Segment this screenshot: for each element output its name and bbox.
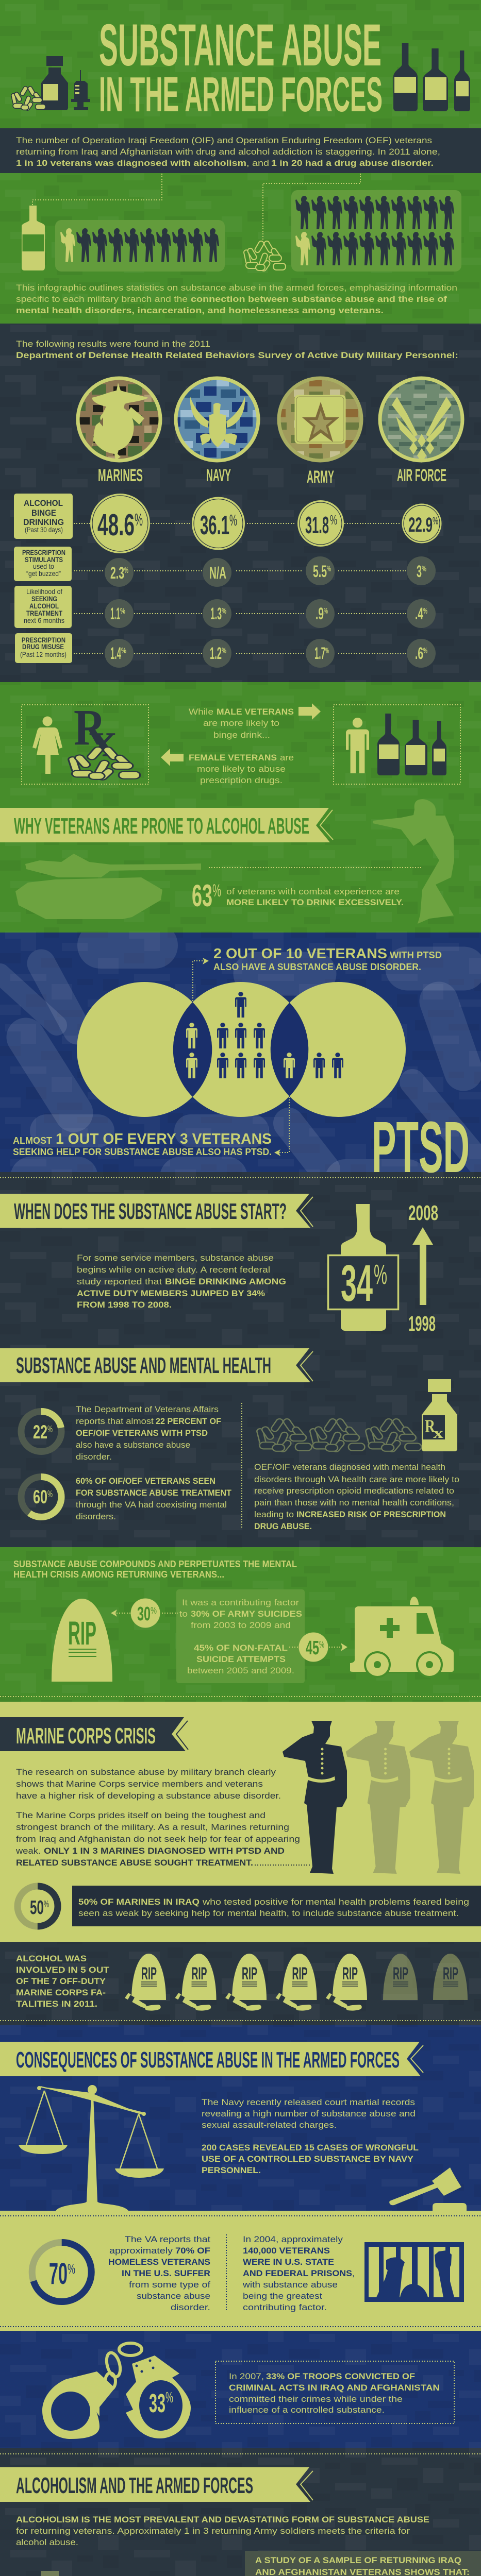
text: marine corps research: ONLY 1 IN 3 MARINES DIAGNOSED WITH PTSD AND xyxy=(44,1846,285,1856)
intro text band xyxy=(0,128,481,173)
text: veterans in prison: with substance abuse xyxy=(242,2280,338,2290)
text: veterans in prison: 140,000 VETERANS xyxy=(243,2246,330,2256)
intro text band: 1 in 10 veterans was diagnosed with alcoholism xyxy=(16,158,246,168)
text: marine corps research: shows that Marine Corps service members and veterans xyxy=(16,1779,263,1789)
donut chart: 60 percent: 60 xyxy=(33,1486,47,1507)
donut chart: 60 percent: % xyxy=(47,1489,53,1499)
venn diagram xyxy=(77,982,406,1117)
branch labels: NAVY xyxy=(206,466,231,485)
text: almost 1 out of every 3 veterans: ALMOST xyxy=(13,1136,52,1146)
text: opioid risk: pain than those with no mental health conditions, xyxy=(254,1498,454,1507)
stat circles: drug misuse: % xyxy=(121,647,126,655)
PTSD ghost pill background xyxy=(0,945,481,1180)
text: 2 out of 10 veterans: WITH PTSD xyxy=(390,950,442,960)
callout: male veterans binge drink: MALE VETERANS xyxy=(217,707,294,717)
row label: alcohol binge drinking: (Past 30 days) xyxy=(25,526,63,534)
panel: male veterans icons xyxy=(334,705,460,784)
section background: suicide green xyxy=(0,1547,481,1702)
stat circles: binge drinking: 36.1 xyxy=(200,511,229,540)
icon: Rx bottle: R xyxy=(425,1416,436,1436)
intro text band: , and xyxy=(246,158,269,168)
text: alcohol and fatalities: TALITIES IN 2011. xyxy=(16,1999,97,2009)
text: binge drinking jump: For some service members, substance abuse xyxy=(77,1253,274,1263)
text: survey intro: Department of Defense Health Related Behaviors Survey of Active Duty Military Personnel: xyxy=(16,350,458,360)
icon: Rx bottle: x xyxy=(433,1425,443,1442)
callout: female veterans prescription abuse xyxy=(189,753,294,785)
stat circles: drug misuse: % xyxy=(325,647,329,655)
stat circles: seeking treatment: .9 xyxy=(316,604,324,623)
stat circles: stimulants: % xyxy=(124,566,128,575)
text: homeless veterans xyxy=(108,2234,210,2312)
donut chart: 70 percent: % xyxy=(68,2261,75,2277)
stat circles: stimulants: 2.3 xyxy=(110,564,124,582)
donut chart: 50 percent: % xyxy=(44,1899,49,1909)
text: survey intro xyxy=(16,339,458,360)
heading: compounds mental health crisis: HEALTH CRISIS AMONG RETURNING VETERANS... xyxy=(13,1569,224,1580)
stat circles: binge drinking: 48.6 xyxy=(97,508,135,542)
text: veterans in prison: WERE IN U.S. STATE xyxy=(243,2257,334,2267)
text: binge drinking jump: begins while on active duty. A recent federal xyxy=(77,1265,270,1275)
callout: male veterans binge drink: While xyxy=(189,707,213,717)
section background: header green xyxy=(0,0,481,324)
text: VA 22 percent xyxy=(76,1404,221,1462)
callout: criminal acts: In 2007, xyxy=(229,2371,264,2381)
arrow: 1998 to 2008 xyxy=(408,1201,438,1335)
callout: criminal acts: influence of a controlled substance. xyxy=(229,2405,385,2415)
dotted connectors from intro xyxy=(32,174,360,241)
donut chart: 50 percent xyxy=(18,1886,58,1926)
row label: prescription drug misuse: (Past 12 months) xyxy=(20,650,67,658)
text: opioid risk: DRUG ABUSE. xyxy=(254,1521,312,1531)
text: homeless veterans: from some type of xyxy=(129,2280,210,2290)
heading: compounds mental health crisis: SUBSTANCE ABUSE COMPOUNDS AND PERPETUATES THE MENTAL xyxy=(13,1559,297,1569)
branch labels xyxy=(98,466,446,487)
icon: Rx bottle xyxy=(422,1379,457,1451)
callout: criminal acts: 33% OF TROOPS CONVICTED OF xyxy=(266,2371,415,2381)
row label: prescription stimulants: “get buzzed” xyxy=(26,569,61,578)
text: veterans in prison: being the greatest xyxy=(243,2291,322,2301)
row label: prescription drug misuse: PRESCRIPTION xyxy=(22,636,65,644)
text: VA 60 percent: 60% OF OIF/OEF VETERANS SEEN xyxy=(76,1476,215,1486)
icon row: seven gravestones xyxy=(125,1954,468,2011)
text: navy court martial xyxy=(202,2097,419,2175)
panel: 50 percent of marines xyxy=(72,1886,481,1926)
arrow: dotted top pointer xyxy=(193,958,209,1001)
arrow: dotted bottom pointer xyxy=(274,1097,289,1156)
row label: seeking alcohol treatment: SEEKING xyxy=(31,595,57,603)
stat circles: stimulants: % xyxy=(327,565,331,573)
row label: seeking alcohol treatment: TREATMENT xyxy=(26,609,62,617)
intro text band: returning from Iraq and Afghanistan with drug and alcohol addiction is staggering. In 2011 alone, xyxy=(16,147,440,157)
icon: scales of justice xyxy=(19,2085,164,2211)
icon: saluting marines xyxy=(283,1721,474,1874)
icon: bottle with 34 percent xyxy=(328,1204,398,1331)
text: opioid risk: leading to xyxy=(254,1510,294,1519)
donut chart: 50 percent: 50 xyxy=(30,1897,44,1919)
banner: consequences xyxy=(0,2042,423,2076)
icon: handcuffs with 33 percent: % xyxy=(165,2389,173,2406)
callout: criminal acts xyxy=(215,2361,454,2424)
text: navy court martial: The Navy recently released court martial records xyxy=(202,2097,415,2107)
panel: suicide statistics xyxy=(176,1589,305,1683)
text: infographic outline: specific to each military branch and the xyxy=(16,294,188,304)
row label: prescription stimulants xyxy=(14,547,72,581)
text: survey intro: The following results were found in the 2011 xyxy=(16,339,210,349)
stat: 30 percent: 30 xyxy=(137,1603,151,1625)
row label: seeking alcohol treatment: Likelihood of xyxy=(26,587,62,596)
branch labels: MARINES xyxy=(98,466,143,485)
icon: gravestone RIP: RIP xyxy=(68,1615,96,1652)
text: veterans in prison: , xyxy=(352,2268,355,2278)
donut chart: 70 percent: 70 xyxy=(49,2257,68,2291)
icon: bottle with 34 percent: % xyxy=(374,1259,387,1290)
stat circles: drug misuse: 1.7 xyxy=(314,644,325,663)
stat: 63 percent combat experience: % xyxy=(212,881,221,901)
row label: seeking alcohol treatment: ALCOHOL xyxy=(29,602,59,610)
stat: 45 percent: % xyxy=(319,1639,324,1650)
banner: substance abuse and mental health: SUBSTANCE ABUSE AND MENTAL HEALTH xyxy=(16,1353,271,1378)
text: opioid risk: disorders through VA health care are more likely to xyxy=(254,1475,459,1484)
row label: alcohol binge drinking: DRINKING xyxy=(23,517,64,527)
banner: alcoholism and the armed forces xyxy=(0,2467,313,2502)
text: alcohol and fatalities: ALCOHOL WAS xyxy=(16,1954,87,1963)
icon: bottle with 34 percent: 34 xyxy=(341,1255,373,1312)
text: almost 1 out of every 3 veterans xyxy=(13,1131,272,1157)
panel: female veterans icons: x xyxy=(89,712,117,768)
stat circles: stimulants: 3 xyxy=(417,562,422,581)
text: almost 1 out of every 3 veterans: SEEKING HELP FOR SUBSTANCE ABUSE ALSO HAS PTSD. xyxy=(13,1147,272,1157)
text: marine corps research: The research on substance abuse by military branch clearly xyxy=(16,1767,276,1777)
text: homeless veterans: HOMELESS VETERANS xyxy=(108,2257,210,2267)
text: alcohol and fatalities: OF THE 7 OFF-DUTY xyxy=(16,1976,106,1986)
text: infographic outline: connection between substance abuse and the rise of xyxy=(191,294,447,304)
row label: prescription drug misuse: DRUG MISUSE xyxy=(22,642,64,651)
row label: alcohol binge drinking: BINGE xyxy=(31,508,56,518)
text: VA 22 percent: reports that almost xyxy=(76,1416,154,1426)
stat: 63 percent combat experience: MORE LIKELY TO DRINK EXCESSIVELY. xyxy=(226,897,404,907)
intro text band: The number of Operation Iraqi Freedom (OIF) and Operation Enduring Freedom (OEF) veterans xyxy=(16,135,432,145)
callout: female veterans prescription abuse: prescription drugs. xyxy=(200,775,283,785)
stat circles: seeking treatment: % xyxy=(324,607,328,616)
callout: female veterans prescription abuse: are xyxy=(280,753,294,762)
text: homeless veterans: The VA reports that xyxy=(125,2234,210,2244)
text: veterans in prison: In 2004, approximately xyxy=(243,2234,343,2244)
text: navy court martial: sexual assault-related charges. xyxy=(202,2120,337,2130)
table dotted connectors xyxy=(74,523,407,653)
text: VA 60 percent xyxy=(76,1476,232,1521)
stat circles: binge drinking: % xyxy=(135,510,143,529)
text: alcohol and fatalities: MARINE CORPS FA- xyxy=(16,1988,106,1997)
text: alcohol and fatalities: INVOLVED IN 5 OUT xyxy=(16,1965,110,1975)
panel: study heading xyxy=(245,2551,481,2576)
icon: gravestone RIP xyxy=(52,1599,112,1682)
stat: 30 percent xyxy=(111,1598,178,1628)
stat circles: binge drinking: 22.9 xyxy=(408,514,433,536)
icon: handcuffs with 33 percent xyxy=(42,2343,191,2439)
stat circles: seeking treatment: 1.3 xyxy=(210,604,222,623)
panel: female veterans icons: R xyxy=(74,699,107,756)
stat: 45 percent: 45 xyxy=(306,1637,319,1659)
text: VA 60 percent: through the VA had coexisting mental xyxy=(76,1500,227,1510)
intro text band: 1 in 20 had a drug abuse disorder. xyxy=(271,158,434,168)
text: 2 out of 10 veterans xyxy=(213,945,442,972)
stat circles: drug misuse: 1.2 xyxy=(210,644,222,663)
stat: 45 percent xyxy=(289,1632,347,1662)
stat: 30 percent: % xyxy=(151,1605,157,1616)
stat: 63 percent combat experience xyxy=(192,878,404,913)
emblem: navy xyxy=(176,378,258,461)
icon: prison bars with hands xyxy=(364,2242,464,2302)
stat: 63 percent combat experience: of veterans with combat experience are xyxy=(226,887,400,896)
text: almost 1 out of every 3 veterans: 1 OUT OF EVERY 3 VETERANS xyxy=(56,1131,272,1147)
text: homeless veterans: disorder. xyxy=(171,2302,210,2312)
section background: marine lime xyxy=(0,1702,481,1942)
title xyxy=(99,12,383,122)
stat circles: binge drinking xyxy=(90,494,441,553)
text: homeless veterans: IN THE U.S. SUFFER xyxy=(122,2268,210,2278)
text: binge drinking jump: study reported that xyxy=(77,1277,162,1286)
section background: survey dark xyxy=(0,324,481,682)
text: marine corps research xyxy=(15,1767,300,1868)
row label: seeking alcohol treatment xyxy=(14,586,72,628)
text: binge drinking jump xyxy=(77,1253,286,1310)
section background: alcoholism dark xyxy=(0,2448,481,2576)
text: veterans in prison xyxy=(242,2234,355,2312)
text: marine corps research: RELATED SUBSTANCE ABUSE SOUGHT TREATMENT. xyxy=(16,1858,253,1868)
text: binge drinking jump: ACTIVE DUTY MEMBERS JUMPED BY 34% xyxy=(77,1289,265,1298)
text: binge drinking jump: FROM 1998 TO 2008. xyxy=(77,1300,172,1310)
icon: outlined pills xyxy=(243,240,286,272)
panel: suicide statistics: to xyxy=(179,1609,188,1619)
banner: substance abuse and mental health xyxy=(0,1348,313,1382)
callout: male veterans binge drink: binge drink... xyxy=(213,730,270,740)
arrow: 1998 to 2008: 1998 xyxy=(408,1312,436,1335)
stat circles: seeking treatment: .4 xyxy=(415,604,423,623)
panel: 1 in 20 soldiers xyxy=(291,190,461,272)
text: navy court martial: revealing a high number of substance abuse and xyxy=(202,2109,416,2119)
banner: marine corps crisis xyxy=(0,1717,188,1751)
donut chart: 22 percent xyxy=(21,1412,61,1452)
text: VA 60 percent: FOR SUBSTANCE ABUSE TREATMENT xyxy=(76,1488,232,1498)
panel: female veterans icons xyxy=(22,699,148,784)
panel: 50 percent of marines: 50% OF MARINES IN IRAQ xyxy=(78,1897,200,1907)
stat: 63 percent combat experience: 63 xyxy=(192,878,212,913)
section background: homeless lime band xyxy=(0,2211,481,2331)
text: alcoholism prevalence xyxy=(16,2515,429,2547)
banner: marine corps crisis: MARINE CORPS CRISIS xyxy=(16,1723,156,1749)
text: alcoholism prevalence: ALCOHOLISM IS THE MOST PREVALENT AND DEVASTATING FORM OF SUBSTANCE ABUSE xyxy=(16,2515,429,2524)
text: navy court martial: PERSONNEL. xyxy=(202,2165,261,2175)
row label: seeking alcohol treatment: next 6 months xyxy=(24,616,64,624)
text: infographic outline: This infographic outlines statistics on substance abuse in the armed forces, emphasizing information xyxy=(16,283,457,293)
panel: 1 in 10 soldiers xyxy=(55,220,225,272)
arrow: right xyxy=(298,703,321,720)
stat circles: drug misuse: 1.4 xyxy=(110,644,121,663)
panel: suicide statistics: 45% OF NON-FATAL xyxy=(194,1643,288,1653)
emblem: air force xyxy=(380,378,462,463)
text: VA 22 percent: 22 PERCENT OF xyxy=(156,1416,221,1426)
panel: suicide statistics: between 2005 and 2009. xyxy=(187,1666,294,1675)
icon: ambulance xyxy=(350,1597,454,1678)
banner: alcoholism and the armed forces: ALCOHOLISM AND THE ARMED FORCES xyxy=(16,2473,253,2498)
callout: criminal acts: CRIMINAL ACTS IN IRAQ AND AFGHANISTAN xyxy=(229,2383,440,2393)
row label: alcohol binge drinking: ALCOHOL xyxy=(24,498,63,508)
panel: 50 percent of marines: who tested positive for mental health problems feared being xyxy=(202,1897,469,1907)
text: opioid risk: INCREASED RISK OF PRESCRIPTION xyxy=(296,1510,446,1519)
row label: alcohol binge drinking xyxy=(14,494,73,539)
row label: prescription stimulants: used to xyxy=(33,562,54,570)
donut chart: 60 percent xyxy=(21,1477,61,1517)
stat circles: stimulants: N/A xyxy=(209,564,226,582)
section background: gender and combat green xyxy=(0,682,481,933)
section background: fatalities dark xyxy=(0,1942,481,2025)
callout: female veterans prescription abuse: more likely to abuse xyxy=(197,764,286,774)
donut chart: 22 percent: 22 xyxy=(33,1421,47,1443)
text: homeless veterans: approximately xyxy=(109,2246,173,2256)
stat circles: binge drinking: % xyxy=(229,511,237,529)
row label: prescription stimulants: STIMULANTS xyxy=(25,555,63,564)
icon: olive pills pile xyxy=(256,1418,421,1453)
banner: when does the substance abuse start xyxy=(0,1194,313,1228)
emblem: marines xyxy=(78,378,160,461)
icon: gavel xyxy=(389,2167,467,2211)
callout: criminal acts: committed their crimes while under the xyxy=(229,2394,403,2404)
stat circles: seeking treatment: % xyxy=(222,607,226,616)
stat circles: seeking treatment xyxy=(105,599,436,628)
stat circles: drug misuse xyxy=(105,639,436,668)
section background: onset and mental health dark xyxy=(0,1172,481,1547)
panel: suicide statistics: It was a contributing factor xyxy=(182,1598,299,1607)
text: homeless veterans: 70% OF xyxy=(175,2246,210,2256)
banner: why veterans are prone to alcohol abuse xyxy=(0,808,333,842)
row label: prescription stimulants: PRESCRIPTION xyxy=(22,548,65,556)
icon: pills, pill bottle and syringe xyxy=(11,56,90,111)
emblem: army xyxy=(279,378,361,461)
stat circles: binge drinking: 31.8 xyxy=(305,512,329,538)
panel: suicide statistics: from 2003 to 2009 and xyxy=(191,1620,291,1630)
text: infographic outline: mental health disorders, incarceration, and homelessness among veterans. xyxy=(16,306,384,315)
icon: tank silhouette xyxy=(15,854,201,919)
text: VA 22 percent: disorder. xyxy=(76,1452,112,1462)
text: alcoholism prevalence: alcohol abuse. xyxy=(16,2537,78,2547)
icon: bottle with drinking levels xyxy=(21,2571,78,2576)
arrow: left xyxy=(161,749,184,766)
icon: aiming soldier silhouette xyxy=(373,799,454,924)
text: veterans in prison: contributing factor. xyxy=(243,2302,327,2312)
stat circles: drug misuse: % xyxy=(222,647,226,655)
heading: compounds mental health crisis xyxy=(13,1559,297,1580)
stat circles: drug misuse: .6 xyxy=(415,644,423,663)
text: navy court martial: USE OF A CONTROLLED SUBSTANCE BY NAVY xyxy=(202,2154,414,2164)
stat circles: binge drinking: % xyxy=(330,512,337,528)
text: VA 60 percent: disorders. xyxy=(76,1512,116,1521)
text: veterans in prison: AND FEDERAL PRISONS xyxy=(243,2268,352,2278)
text: marine corps research: from Iraq and Afghanistan do not seek help for fear of appearing xyxy=(16,1834,300,1844)
panel: suicide statistics: SUICIDE ATTEMPTS xyxy=(196,1654,286,1664)
branch labels: ARMY xyxy=(307,467,334,487)
stat circles: stimulants: 5.5 xyxy=(313,562,327,581)
text: marine corps research: weak. xyxy=(15,1846,41,1856)
donut chart: 22 percent: % xyxy=(47,1424,53,1434)
stat circles: binge drinking: % xyxy=(433,515,438,527)
arrow: 1998 to 2008: 2008 xyxy=(408,1201,438,1225)
callout: male veterans binge drink xyxy=(189,707,294,740)
text: VA 22 percent: OEF/OIF VETERANS WITH PTSD xyxy=(76,1428,208,1438)
text: marine corps research: The Marine Corps prides itself on being the toughest and xyxy=(16,1810,266,1820)
stat circles: seeking treatment: 1.1 xyxy=(110,604,120,623)
text: 2 out of 10 veterans: ALSO HAVE A SUBSTANCE ABUSE DISORDER. xyxy=(213,962,421,972)
text: VA 22 percent: also have a substance abuse xyxy=(76,1440,190,1450)
icon: three liquor bottles xyxy=(393,43,470,111)
stat circles: stimulants xyxy=(105,556,436,587)
section background: PTSD blue xyxy=(0,933,481,1172)
people in venn xyxy=(186,992,343,1078)
text: infographic outline xyxy=(16,283,457,315)
text: binge drinking jump: BINGE DRINKING AMONG xyxy=(165,1277,286,1286)
text: opioid risk xyxy=(254,1462,459,1531)
section background: consequences blue xyxy=(0,2025,481,2448)
text: VA 22 percent: The Department of Veterans Affairs xyxy=(76,1404,219,1414)
panel: suicide statistics: 30% OF ARMY SUICIDES xyxy=(191,1609,302,1619)
text: marine corps research: strongest branch of the military. As a result, Marines returning xyxy=(16,1822,289,1832)
donut chart: 70 percent xyxy=(32,2242,91,2302)
stat circles: seeking treatment: % xyxy=(120,607,125,616)
stat circles: drug misuse: % xyxy=(423,647,427,655)
text: opioid risk: receive prescription opioid medications related to xyxy=(254,1486,454,1496)
panel: study heading: A STUDY OF A SAMPLE OF RETURNING IRAQ xyxy=(255,2555,461,2565)
text: navy court martial: 200 CASES REVEALED 15 CASES OF WRONGFUL xyxy=(202,2143,419,2153)
text: marine corps research: have a higher risk of developing a substance abuse disorder. xyxy=(16,1791,281,1801)
stat circles: stimulants: % xyxy=(422,565,426,573)
text: 2 out of 10 veterans: 2 OUT OF 10 VETERANS xyxy=(213,945,387,961)
text: alcoholism prevalence: for returning veterans. Approximately 1 in 3 returning Army soldiers meets the criteria for xyxy=(16,2526,410,2536)
icon: alcohol bottle one tenth filled xyxy=(22,206,45,270)
text: alcohol and fatalities xyxy=(16,1954,110,2009)
panel: 50 percent of marines: seen as weak by seeking help for mental health, to include substance abuse treatment. xyxy=(78,1908,459,1918)
text: opioid risk: OEF/OIF veterans diagnosed with mental health xyxy=(254,1462,445,1472)
callout: female veterans prescription abuse: FEMALE VETERANS xyxy=(189,753,277,762)
stat circles: seeking treatment: % xyxy=(423,607,427,616)
callout: male veterans binge drink: are more likely to xyxy=(203,718,279,728)
row label: prescription drug misuse xyxy=(15,633,72,663)
text: homeless veterans: substance abuse xyxy=(137,2291,210,2301)
icon: handcuffs with 33 percent: 33 xyxy=(149,2388,165,2418)
